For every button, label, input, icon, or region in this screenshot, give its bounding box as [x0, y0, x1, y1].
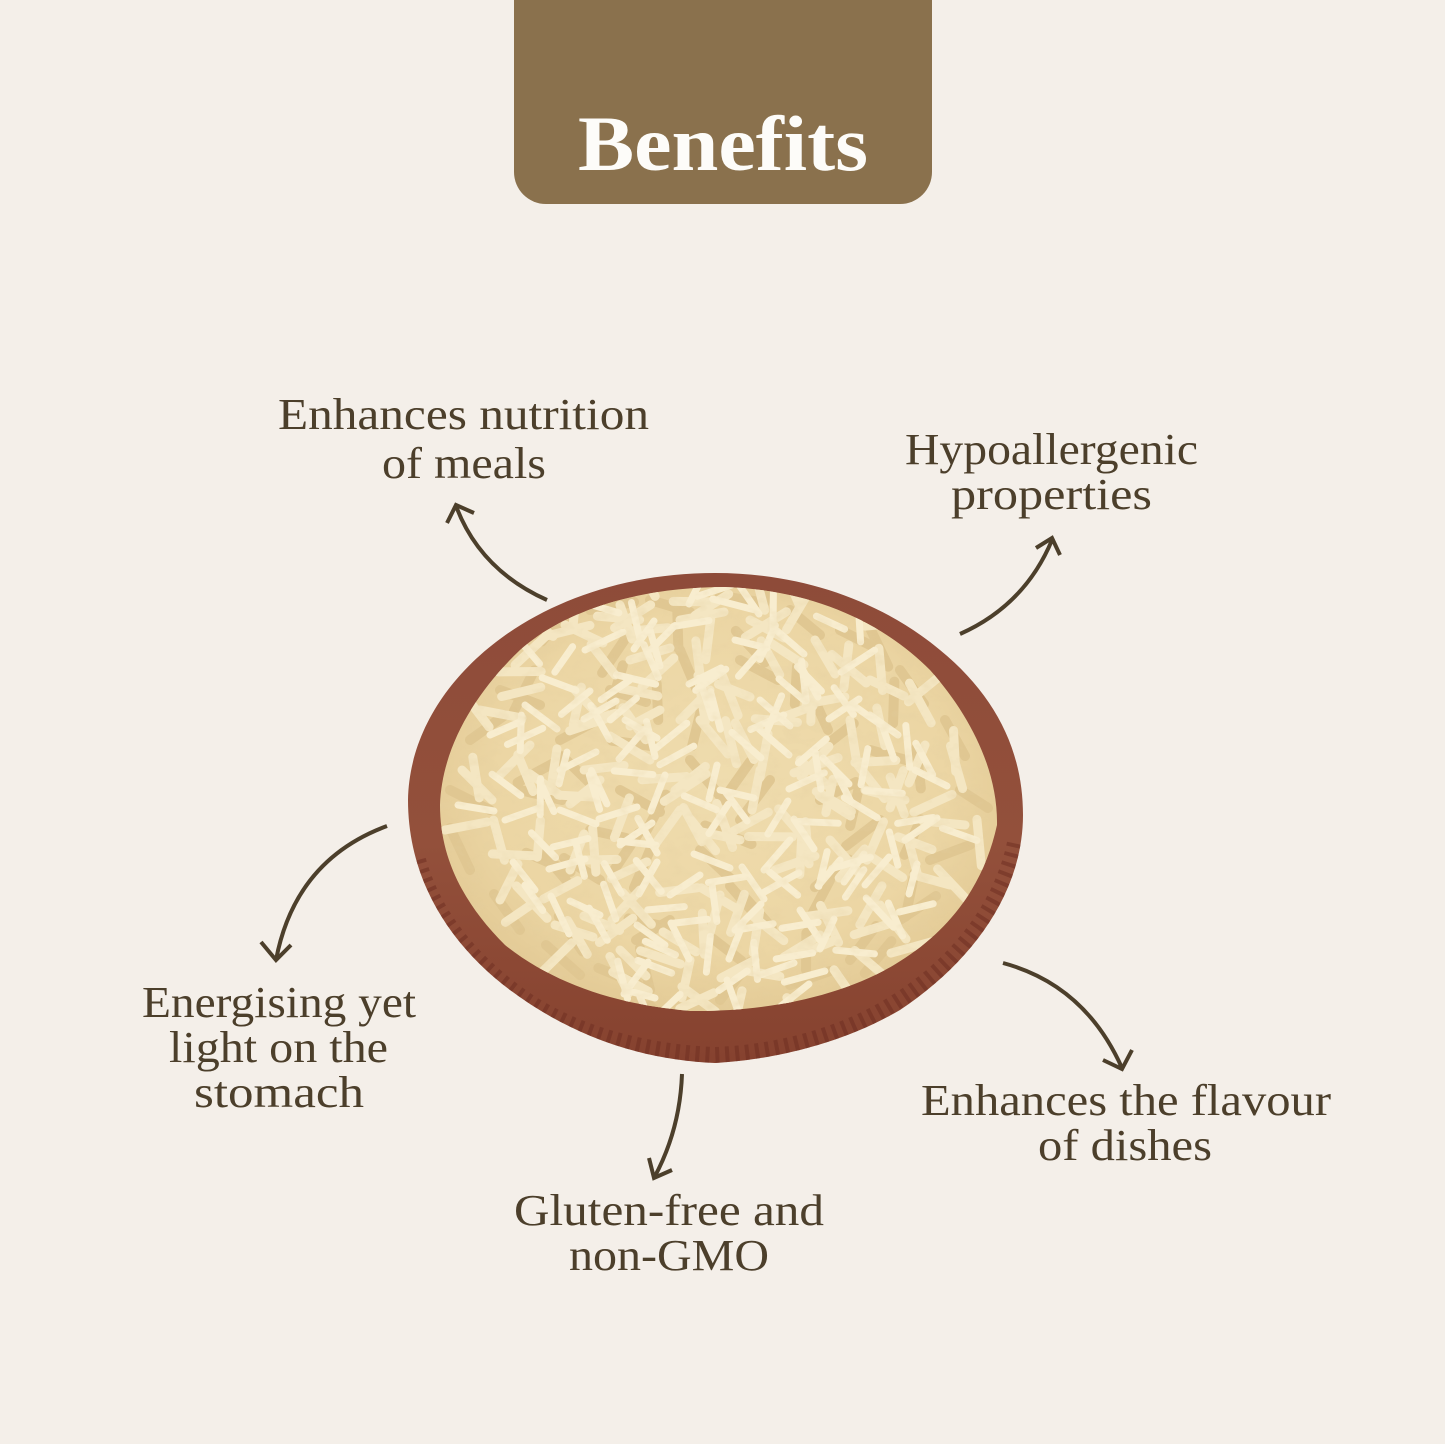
text: flavour: Enhances the flavour — [921, 1076, 1331, 1125]
title: Benefits — [578, 100, 868, 187]
bowl of rice — [408, 573, 1023, 1063]
rice — [440, 587, 997, 1011]
text: gluten-free — [514, 1186, 824, 1280]
text: gluten-free: non-GMO — [569, 1231, 769, 1280]
text: enhances nutrition: of meals — [382, 439, 546, 488]
text: energising: Energising yet — [142, 978, 416, 1027]
text: hypoallergenic: properties — [951, 470, 1152, 519]
clay bowl — [408, 573, 1023, 1063]
text: enhances nutrition — [278, 390, 649, 488]
text: energising: stomach — [194, 1068, 364, 1117]
text: energising — [142, 978, 416, 1117]
title banner — [514, 0, 932, 204]
arrow: to energising — [261, 826, 387, 960]
arrow: to flavour — [1003, 963, 1132, 1069]
text: hypoallergenic — [905, 425, 1198, 519]
text: hypoallergenic: Hypoallergenic — [905, 425, 1198, 474]
arrow: to hypoallergenic — [960, 538, 1060, 634]
text: flavour — [921, 1076, 1331, 1170]
text: energising: light on the — [169, 1023, 388, 1072]
text: flavour: of dishes — [1038, 1121, 1212, 1170]
arrow: to gluten-free — [649, 1074, 682, 1178]
text: enhances nutrition: Enhances nutrition — [278, 390, 649, 439]
arrow: to enhances nutrition — [447, 505, 547, 600]
text: gluten-free: Gluten-free and — [514, 1186, 824, 1235]
